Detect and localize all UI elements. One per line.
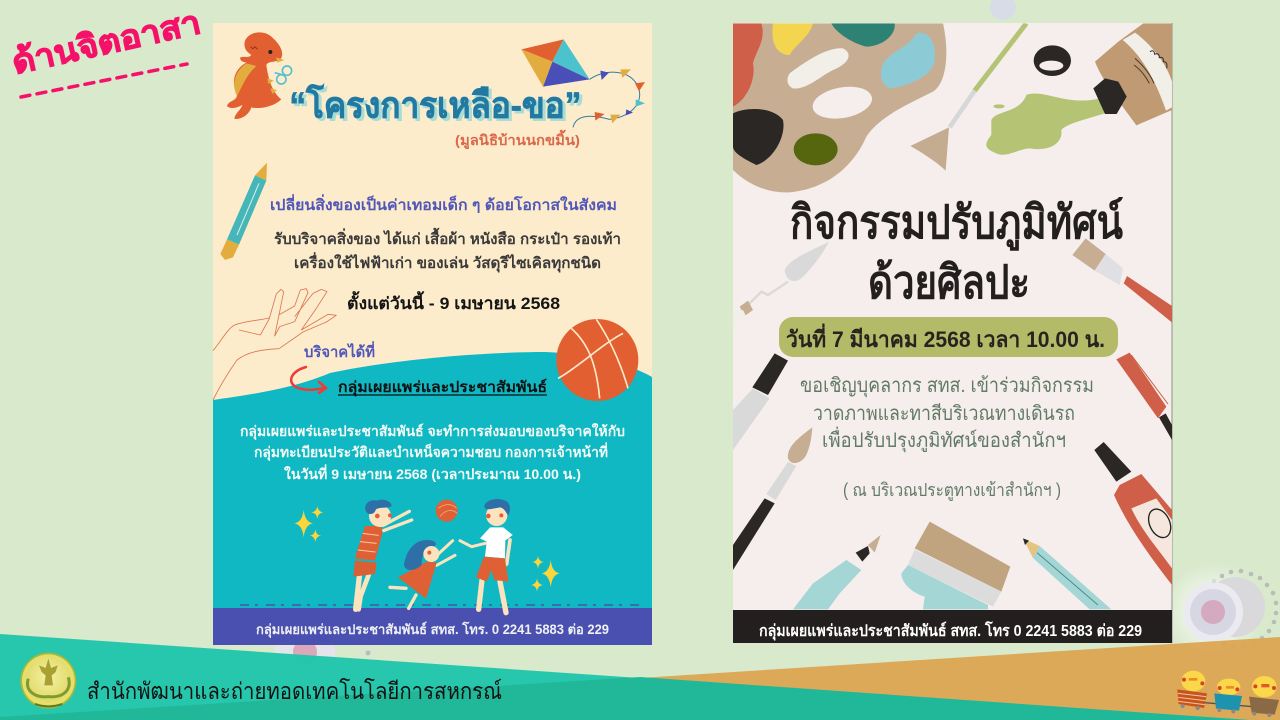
footer bar: กลุ่มเผยแพร่และประชาสัมพันธ์ สทส. โทร 0 2241 5883 ต่อ 229 [759, 620, 1142, 641]
organisation seal [20, 653, 76, 709]
bottom right decorative disc [1163, 562, 1278, 662]
illustrations layer [220, 32, 645, 401]
icon: palette knife [740, 242, 829, 316]
title line 2: ด้วยศิลปะ [868, 256, 1030, 308]
icon: pencil [1023, 538, 1111, 609]
body text [240, 422, 625, 482]
teal wave background [213, 352, 652, 608]
icon: pencil [220, 163, 267, 260]
icon: red pen [1116, 353, 1172, 440]
body text: กลุ่มทะเบียนประวัติและบำเหน็จความชอบ กองการเจ้าหน้าที่ [254, 442, 608, 461]
date pill: วันที่ 7 มีนาคม 2568 เวลา 10.00 น. [786, 323, 1105, 352]
title: “โครงการเหลือ-ขอ” [289, 83, 581, 125]
title shadow: “โครงการเหลือ-ขอ” [292, 86, 584, 128]
icon: paint tube and spill [986, 23, 1172, 155]
ball [436, 500, 458, 522]
icon: flat brush [1072, 238, 1173, 323]
footer text: กลุ่มเผยแพร่และประชาสัมพันธ์ สทส. โทร. 0 2241 5883 ต่อ 229 [256, 620, 609, 638]
icon: wide brush [901, 522, 1010, 609]
invitation text: ขอเชิญบุคลากร สทส. เข้าร่วมกิจกรรม [800, 375, 1094, 398]
subtitle: (มูลนิธิบ้านนกขมิ้น) [455, 129, 580, 149]
location text: ( ณ บริเวณประตูทางเข้าสำนักฯ ) [843, 480, 1061, 501]
date pill [779, 317, 1118, 357]
invitation text: วาดภาพและทาสีบริเวณทางเดินรถ [813, 403, 1075, 425]
icon: dinosaur [227, 32, 292, 119]
organisation name: สำนักพัฒนาและถ่ายทอดเทคโนโลยีการสหกรณ์ [87, 678, 502, 704]
icon: kite [521, 39, 645, 127]
illustrations upper mid [733, 238, 1173, 328]
icon: teal brush pen [793, 535, 881, 609]
illustrations lower [733, 353, 1175, 609]
donate label: บริจาคได้ที่ [304, 341, 375, 361]
icon: round brush [733, 427, 812, 570]
invitation text [800, 375, 1094, 453]
orange footer band [640, 637, 1280, 720]
green footer band [0, 634, 1250, 720]
purple footer bar [213, 605, 652, 645]
date: ตั้งแต่วันนี้ - 9 เมษายน 2568 [347, 291, 560, 313]
icon: paint palette [733, 23, 946, 192]
heading dashed underline [21, 64, 187, 97]
body text: กลุ่มเผยแพร่และประชาสัมพันธ์ จะทำการส่งมอบของบริจาคให้กับ [240, 422, 625, 440]
heading: ด้านจิตอาสา [9, 3, 204, 81]
invitation text: เพื่อปรับปรุงภูมิทัศน์ของสำนักฯ [822, 426, 1066, 453]
footer bar [733, 610, 1172, 643]
icon: open hand outline [213, 289, 336, 400]
chick carts [1177, 671, 1279, 717]
child left [353, 500, 412, 609]
top decorative circle [990, 0, 1016, 20]
icon: fan brush [910, 23, 1026, 171]
title line 1: กิจกรรมปรับภูมิทัศน์ [790, 196, 1123, 251]
child right [460, 499, 513, 613]
panel: donation poster [213, 23, 652, 645]
icon: sparkles [294, 506, 560, 591]
lead text: เปลี่ยนสิ่งของเป็นค่าเทอมเด็ก ๆ ด้อยโอกาสในสังคม [270, 194, 617, 214]
panel: art activity poster [733, 23, 1175, 643]
items line 2: เครื่องใช้ไฟฟ้าเก่า ของเล่น วัสดุรีไซเคิลทุกชนิด [294, 252, 601, 273]
icon: basketball [556, 319, 638, 401]
illustration: children playing ball [353, 499, 513, 613]
items line 1: รับบริจาคสิ่งของ ได้แก่ เสื้อผ้า หนังสือ กระเป๋า รองเท้า [274, 227, 621, 248]
icon: marker left [733, 353, 788, 450]
icon: red arrow [291, 367, 326, 393]
icon: red tube [1094, 442, 1175, 585]
illustrations top [733, 23, 1172, 192]
body text: ในวันที่ 9 เมษายน 2568 (เวลาประมาณ 10.00 น.) [284, 464, 581, 482]
icon: tube cap [1034, 45, 1071, 76]
donate place: กลุ่มเผยแพร่และประชาสัมพันธ์ [338, 378, 547, 397]
decorative disc behind footer [275, 622, 370, 682]
child middle [390, 540, 455, 608]
